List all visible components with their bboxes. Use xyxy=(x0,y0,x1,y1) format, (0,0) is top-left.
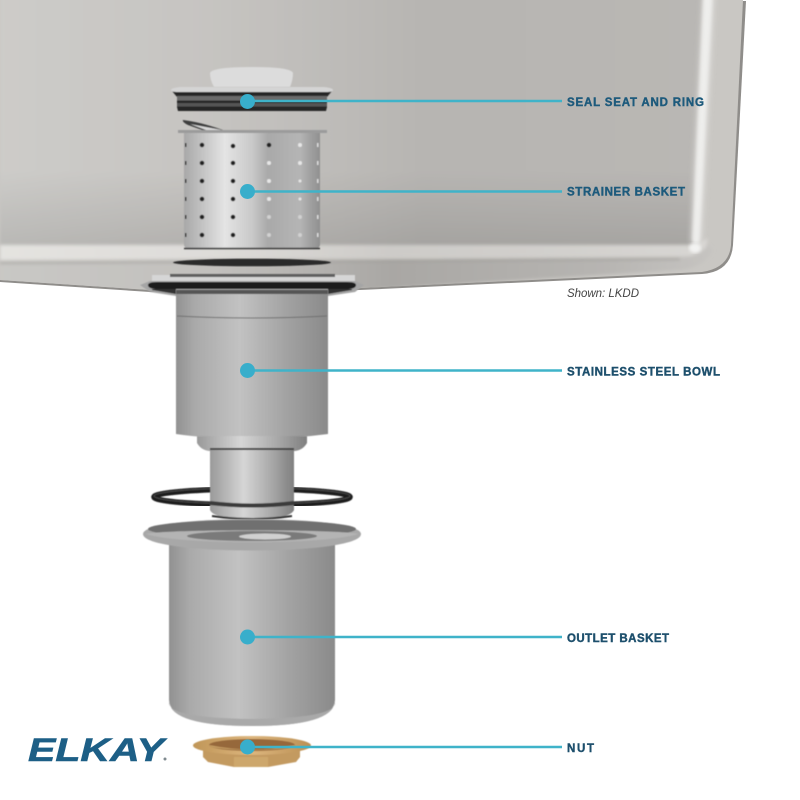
brass nut xyxy=(193,736,311,767)
basket holes xyxy=(185,143,318,237)
stainless steel bowl xyxy=(176,290,328,439)
callout: stainless steel bowl: STAINLESS STEEL BOWL xyxy=(567,366,720,378)
caption: Shown: LKDD xyxy=(567,288,639,300)
drain flange xyxy=(140,274,364,296)
outlet basket xyxy=(143,519,361,726)
callout: strainer basket: STRAINER BASKET xyxy=(567,186,685,198)
sink basin xyxy=(0,0,800,300)
gasket ring back xyxy=(154,488,350,505)
strainer basket xyxy=(178,120,327,249)
seal seat and ring xyxy=(171,87,333,111)
sealing gasket xyxy=(173,259,331,266)
callout: seal seat and ring xyxy=(240,94,704,109)
callout: outlet basket: OUTLET BASKET xyxy=(567,633,669,645)
callout: seal seat and ring: SEAL SEAT AND RING xyxy=(567,97,704,109)
callout: nut: NUT xyxy=(567,743,594,755)
callout: stainless steel bowl xyxy=(240,363,720,378)
callout: nut xyxy=(240,740,594,755)
callout: strainer basket xyxy=(240,184,685,199)
strainer stopper knob xyxy=(210,67,293,87)
callout: outlet basket xyxy=(240,630,669,645)
drain neck xyxy=(197,436,307,520)
logo: Elkay: ELKAY xyxy=(28,732,167,768)
